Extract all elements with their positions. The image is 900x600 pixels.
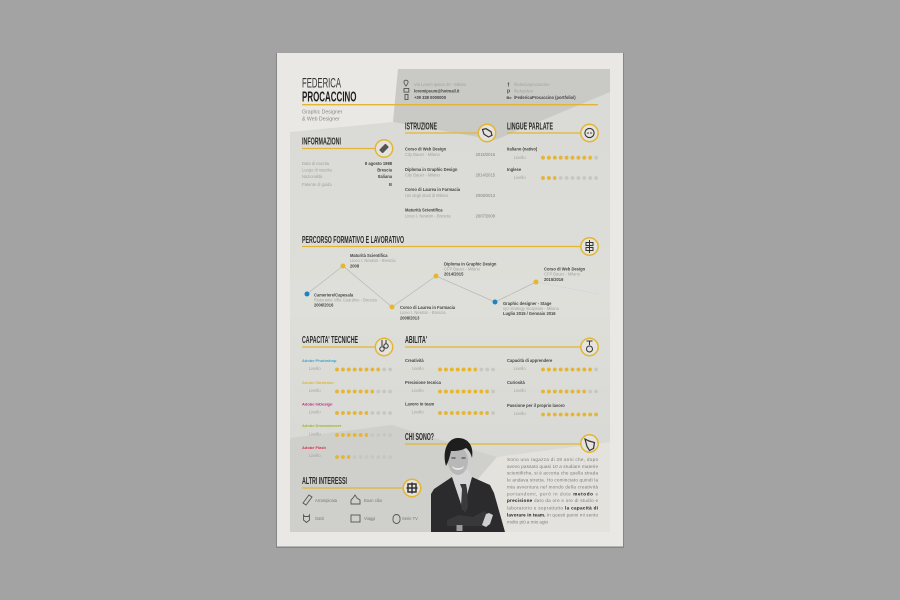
text: about: precisione dato da ore e ore di studio e bbox=[507, 498, 598, 503]
chart: timeline: Maturità Scientifica bbox=[350, 253, 388, 258]
contacts left: Via Lorem Ipsum 20 - Milano bbox=[414, 82, 467, 87]
chart: timeline: 2015/2016 bbox=[544, 277, 564, 282]
paper sheet bbox=[276, 53, 624, 548]
contacts right: f bbox=[508, 82, 510, 88]
jacket bbox=[431, 477, 505, 532]
icon: mail bbox=[404, 88, 409, 92]
chart: timeline bbox=[304, 253, 598, 320]
section: abilita: Livello bbox=[514, 388, 526, 393]
contacts right: Be bbox=[506, 95, 512, 100]
header rule bbox=[302, 104, 598, 106]
icon: travel bbox=[351, 515, 360, 522]
icon: phone bbox=[405, 94, 408, 100]
section: istruzione: Liceo I. Newton - Brescia bbox=[405, 214, 451, 218]
section: lingue parlate bbox=[507, 122, 598, 180]
section: altri interessi: Buon cibo bbox=[364, 498, 383, 503]
section: informazioni: Luogo di nascita bbox=[302, 168, 333, 172]
text: about: lavorare in team. In questi panni mi sento bbox=[507, 512, 598, 517]
section: capacita tecniche: CAPACITA' TECNICHE bbox=[302, 335, 358, 346]
section: istruzione bbox=[405, 122, 496, 218]
section: informazioni: INFORMAZIONI bbox=[302, 136, 341, 148]
panel: about shade bbox=[432, 442, 610, 532]
section: istruzione: Corso di Web Design bbox=[405, 146, 447, 152]
panel: lower left shade bbox=[290, 425, 497, 532]
section: abilita: ABILITA' bbox=[405, 335, 427, 346]
section: percorso heading: PERCORSO FORMATIVO E LAVORATIVO bbox=[302, 235, 404, 246]
chart: timeline: Luglio 2015 / Gennaio 2016 bbox=[503, 311, 556, 316]
section: capacita tecniche: Adobe Illustrator bbox=[302, 380, 334, 385]
section: lingue parlate: Livello bbox=[514, 155, 526, 160]
section: lingue parlate: Livello bbox=[514, 175, 526, 180]
text: about: molto più a mio agio bbox=[507, 519, 549, 524]
neck and shirt bbox=[452, 470, 472, 510]
text: about: laboratorio e soprattutto la capacità di bbox=[507, 505, 598, 510]
section: abilita: Livello bbox=[412, 388, 424, 393]
chart: timeline: 2008 bbox=[350, 264, 360, 268]
section: capacita tecniche: Adobe Photoshop bbox=[302, 358, 337, 363]
section: capacita tecniche: Livello bbox=[309, 432, 321, 436]
hair bbox=[445, 438, 472, 466]
chart: timeline: xyz strategy incapsion - Milano bbox=[503, 306, 560, 311]
chart: timeline: Liceo I. Newton - Brescia bbox=[400, 310, 446, 315]
contacts left bbox=[404, 80, 467, 100]
chart: timeline: Liceo I. Newton - Brescia bbox=[350, 258, 396, 263]
chart: timeline: 2006/2016 bbox=[314, 302, 334, 308]
section: chi sono: CHI SONO? bbox=[405, 432, 434, 443]
text: job title: & Web Designer bbox=[302, 116, 340, 122]
section: istruzione: 2007/2008 bbox=[476, 214, 496, 218]
section: capacita tecniche: Livello bbox=[309, 366, 321, 371]
chart: timeline: Graphic designer - Stage bbox=[503, 301, 552, 306]
section: capacita tecniche: Livello bbox=[309, 410, 321, 414]
icon: rings bbox=[375, 338, 393, 356]
section: informazioni: Italiana bbox=[378, 174, 393, 179]
text: job title bbox=[302, 110, 343, 122]
contacts right: p bbox=[507, 88, 510, 94]
icon: cat bbox=[304, 515, 310, 522]
chart: timeline: CFP Bauer - Milano bbox=[544, 272, 581, 276]
section: abilita: Curiosità bbox=[507, 380, 525, 385]
section: percorso heading bbox=[302, 235, 598, 255]
chart: timeline: CFP Bauer - Milano bbox=[444, 266, 481, 272]
chart: timeline: Corso di Web Design bbox=[544, 266, 586, 272]
section: abilita: Livello bbox=[514, 411, 526, 416]
eyes bbox=[452, 457, 466, 459]
section: informazioni: 8 agosto 1988 bbox=[365, 161, 393, 166]
section: istruzione: Diploma in Graphic Design bbox=[405, 167, 458, 172]
text: about: Sono una ragazza di 28 anni che, dopo bbox=[507, 457, 598, 462]
icon: map pin bbox=[404, 80, 408, 86]
section: abilita: Capacità di apprendere bbox=[507, 358, 553, 363]
section: abilita: Passione per il proprio lavoro bbox=[507, 403, 565, 408]
panel: header shade bbox=[393, 69, 610, 140]
section: abilita: Precisione tecnica bbox=[405, 380, 442, 385]
icon: tv bbox=[393, 514, 400, 524]
contacts right bbox=[506, 82, 576, 100]
section: informazioni: Patente di guida bbox=[302, 182, 332, 187]
icon: unicycle bbox=[581, 338, 598, 356]
section: capacita tecniche: Adobe Dreamweaver bbox=[302, 423, 342, 428]
face bbox=[448, 447, 468, 475]
text: about: avevo passato quasi 10 a studiare materie bbox=[507, 464, 598, 469]
section: altri interessi: Serie TV bbox=[402, 516, 418, 521]
section: abilita: Livello bbox=[412, 410, 424, 414]
section: istruzione: City Bauer - Milano bbox=[405, 152, 441, 157]
text: about: portandomi, però in dote metodo e bbox=[507, 491, 598, 496]
contacts right: /fedepdesi bbox=[514, 88, 533, 94]
icon: puzzle bbox=[403, 479, 421, 497]
icon: signpost bbox=[581, 238, 598, 255]
section: istruzione: 2008/2013 bbox=[476, 193, 496, 198]
photo: portrait bbox=[431, 438, 505, 532]
title: name: PROCACCINO bbox=[302, 90, 356, 106]
arms bbox=[447, 511, 491, 526]
section: chi sono bbox=[405, 432, 598, 452]
text: about: scientifiche, si è accorta che quella strada bbox=[507, 471, 598, 476]
chart: timeline: Diploma in Graphic Design bbox=[444, 262, 497, 266]
section: capacita tecniche bbox=[302, 335, 393, 459]
contacts right: /federicaprocaccino bbox=[514, 82, 550, 87]
chart: timeline: Corso di Laurea in Farmacia bbox=[400, 305, 456, 310]
section: informazioni: Data di nascita bbox=[302, 161, 330, 166]
chart: timeline: 2008/2013 bbox=[400, 316, 420, 320]
chart: timeline: Cameriere/Capesala bbox=[314, 292, 354, 298]
section: altri interessi: Gatti bbox=[315, 516, 324, 521]
watch bbox=[456, 525, 462, 531]
hands bbox=[482, 513, 493, 527]
section: istruzione: City Bauer - Milano bbox=[405, 172, 441, 178]
section: capacita tecniche: Livello bbox=[309, 388, 321, 393]
section: altri interessi: Arrampicata bbox=[315, 498, 338, 503]
section: altri interessi: Viaggi bbox=[364, 516, 375, 521]
section: istruzione: 2014/2015 bbox=[476, 172, 496, 178]
section: lingue parlate: LINGUE PARLATE bbox=[507, 122, 553, 132]
section: istruzione: Uni degli studi di Milano bbox=[405, 193, 449, 198]
icon: hand bbox=[581, 435, 598, 452]
section: abilita: Livello bbox=[412, 366, 424, 371]
text: job title: Graphic Designer bbox=[302, 110, 343, 116]
panel: page background shade bbox=[290, 69, 610, 532]
icon: books bbox=[478, 124, 496, 142]
section: informazioni: B bbox=[389, 182, 392, 187]
contacts left: +39 338 0000000 bbox=[414, 95, 447, 100]
title: name bbox=[302, 75, 356, 106]
section: abilita bbox=[405, 335, 598, 416]
icon: speech bubble bbox=[581, 124, 598, 142]
tie bbox=[460, 484, 468, 513]
section: altri interessi: ALTRI INTERESSI bbox=[302, 476, 347, 487]
section: istruzione: ISTRUZIONE bbox=[405, 122, 437, 132]
title: name: FEDERICA bbox=[302, 75, 341, 91]
section: istruzione: Maturità Scientifica bbox=[405, 208, 443, 212]
text: about bbox=[507, 457, 598, 524]
section: altri interessi bbox=[302, 476, 421, 524]
section: capacita tecniche: Livello bbox=[309, 453, 321, 458]
contacts right: /FedericaProcaccino (portfolio/) bbox=[514, 95, 576, 100]
section: informazioni: Brescia bbox=[377, 168, 393, 172]
smile bbox=[452, 466, 464, 470]
section: informazioni bbox=[302, 136, 393, 187]
icon: food bbox=[351, 495, 360, 504]
section: capacita tecniche: Adobe Flash bbox=[302, 445, 327, 450]
text: about: mia avventura nel mondo della creatività bbox=[507, 484, 598, 489]
section: lingue parlate: Italiano (nativo) bbox=[507, 146, 538, 152]
section: lingue parlate: Inglese bbox=[507, 167, 522, 172]
section: informazioni: Nazionalità bbox=[302, 174, 323, 179]
contacts left: loremipsum@hotmail.it bbox=[414, 88, 460, 94]
chart: timeline: 2014/2015 bbox=[444, 272, 464, 276]
section: abilita: Creatività bbox=[405, 358, 424, 363]
section: capacita tecniche: Adobe InDesign bbox=[302, 402, 333, 406]
text: about: le andava stretta. Ho cominciato quindi la bbox=[507, 478, 598, 482]
section: abilita: Lavoro in team bbox=[405, 402, 434, 406]
icon: tag bbox=[375, 140, 393, 157]
section: abilita: Livello bbox=[514, 366, 526, 371]
icon: climbing bbox=[303, 495, 312, 505]
section: istruzione: 2015/2016 bbox=[476, 152, 496, 157]
section: istruzione: Corso di Laurea in Farmacia bbox=[405, 187, 461, 192]
chart: timeline: Ristorante Villa Guardino - Brescia bbox=[314, 298, 377, 302]
